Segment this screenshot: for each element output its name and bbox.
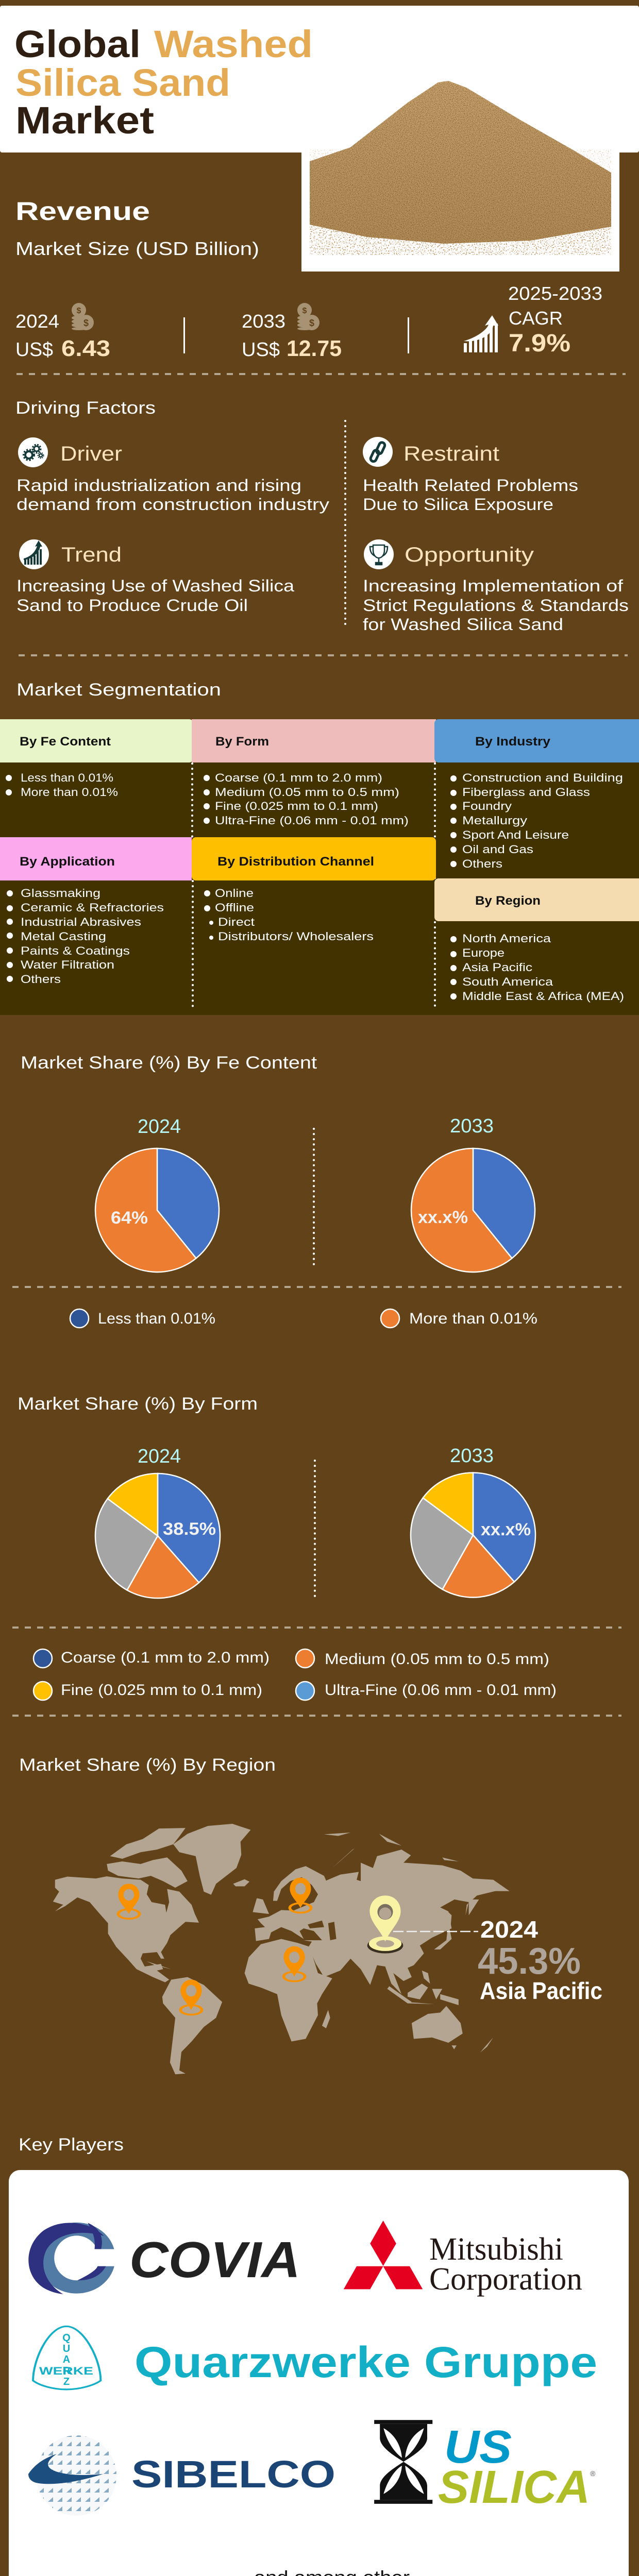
chart: form 2033 pie: [411, 1445, 535, 1597]
chart: fe content 2024 pie: [95, 1116, 219, 1272]
panel: restraint: Health Related Problems: [363, 476, 578, 495]
segment: by fe content: More than 0.01%: [21, 786, 118, 799]
revenue stat 2024: US$: [15, 339, 53, 361]
segment: by industry: Metallurgy: [462, 814, 527, 827]
segment: by distribution channel: Direct: [218, 916, 255, 928]
logo: us silica: ®: [590, 2469, 596, 2478]
segment: by application: Water Filtration: [21, 958, 114, 971]
revenue stat 2033: [242, 303, 342, 361]
revenue heading: Revenue: [15, 197, 150, 226]
market size subtitle: Market Size (USD Billion): [15, 238, 259, 259]
form heading: Market Share (%) By Form: [18, 1394, 258, 1414]
icon: trophy: [364, 539, 394, 569]
icon: pin europe: [290, 1878, 311, 1912]
segment: by region: Middle East & Africa (MEA): [462, 990, 624, 1003]
legend: form: [33, 1649, 557, 1700]
panel: market segmentation: [0, 719, 639, 1015]
logo: us silica: US: [444, 2421, 512, 2473]
logo: mitsubishi corporation: [344, 2221, 582, 2297]
north america: [53, 1876, 199, 1982]
segment: by distribution channel: Distributors/ Wholesalers: [218, 930, 374, 943]
panel: opportunity: for Washed Silica Sand: [363, 615, 563, 634]
chart: fe content 2024 pie: 2024: [138, 1116, 181, 1138]
icon: trend arrow: [19, 539, 49, 569]
segment: by application: Ceramic & Refractories: [21, 901, 164, 914]
segment: by form: Ultra-Fine (0.06 mm - 0.01 mm): [215, 814, 409, 827]
segment: by industry: Sport And Leisure: [462, 828, 569, 841]
segment: by region: North America: [462, 932, 551, 945]
australia: [412, 2006, 493, 2053]
legend: fe content: More than 0.01%: [409, 1310, 537, 1327]
icon: coins: [297, 303, 320, 330]
logo: quarzwerke gruppe: U: [63, 2343, 70, 2354]
logo: mitsubishi corporation: Corporation: [429, 2262, 582, 2297]
title: Silica Sand: [15, 61, 230, 104]
title: Washed: [154, 23, 313, 65]
logo: covia: COVIA: [129, 2231, 300, 2288]
logo: quarzwerke gruppe: WERKE: [39, 2365, 93, 2377]
legend: form: Fine (0.025 mm to 0.1 mm): [61, 1682, 262, 1699]
segment: by form: Fine (0.025 mm to 0.1 mm): [215, 800, 378, 812]
segment: by application: Industrial Abrasives: [21, 916, 141, 928]
segment: by application: Paints & Coatings: [21, 944, 130, 957]
segment: by fe content: Less than 0.01%: [21, 771, 113, 784]
panel: key players: [9, 2170, 629, 2576]
panel: trend: Increasing Use of Washed Silica: [16, 577, 294, 595]
segment: by application: Others: [21, 973, 61, 986]
legend: form: Medium (0.05 mm to 0.5 mm): [325, 1651, 549, 1668]
world map: [53, 1824, 510, 2074]
logo: quarzwerke gruppe: Q: [62, 2332, 71, 2344]
map pins: [118, 1878, 403, 2014]
chart: form 2033 pie: 2033: [450, 1445, 494, 1467]
icon: gears: [18, 437, 48, 467]
legend: fe content: Less than 0.01%: [98, 1310, 215, 1327]
revenue stat 2024: 2024: [15, 311, 59, 332]
icon: chain link: [363, 437, 393, 467]
panel: restraint: [363, 437, 578, 514]
CAGR stat: 2025-2033: [508, 283, 602, 304]
logo: us silica: [374, 2420, 596, 2513]
segment: by region: South America: [462, 975, 553, 988]
revenue stat 2024: 6.43: [61, 336, 110, 361]
callout: asia pacific share: 2024: [480, 1916, 538, 1943]
icon: pin south america: [180, 1980, 202, 2014]
icon: coins: $: [302, 307, 307, 315]
legend: fe content: [70, 1309, 537, 1328]
revenue stat 2033: US$: [242, 339, 280, 361]
panel: trend: Sand to Produce Crude Oil: [16, 596, 248, 615]
panel: restraint: Due to Silica Exposure: [363, 495, 553, 514]
eurasia: [255, 1850, 510, 1994]
segment: by industry: Fiberglass and Glass: [462, 786, 590, 799]
CAGR stat: CAGR: [509, 308, 563, 329]
logo: covia: [28, 2223, 300, 2294]
driving factors heading: Driving Factors: [15, 398, 156, 418]
segment: by region: Asia Pacific: [462, 961, 532, 974]
chart: form 2024 pie: [95, 1446, 220, 1598]
segment: by region: [434, 878, 639, 1003]
callout: asia pacific share: Asia Pacific: [480, 1977, 602, 2004]
segment: by distribution channel: Online: [215, 887, 254, 900]
logo: quarzwerke gruppe: Z: [63, 2376, 70, 2387]
fe content heading: Market Share (%) By Fe Content: [21, 1053, 317, 1073]
chart: fe content 2033 pie: 2033: [450, 1115, 494, 1137]
revenue stat 2024: [15, 303, 110, 361]
icon: pin africa: [284, 1946, 305, 1981]
segment: by region: By Region: [475, 894, 541, 908]
segment: by application: [0, 837, 192, 986]
icon: coins: $: [309, 318, 314, 328]
logo: sibelco: [28, 2432, 335, 2519]
legend: form: Ultra-Fine (0.06 mm - 0.01 mm): [325, 1682, 557, 1699]
segment: by distribution channel: [192, 837, 436, 943]
CAGR stat: 7.9%: [509, 330, 570, 357]
segment: by form: Medium (0.05 mm to 0.5 mm): [215, 786, 399, 799]
segment: by region: Europe: [462, 946, 505, 959]
panel: driver: Rapid industrialization and rising: [16, 476, 301, 495]
chart: fe content 2033 pie: [411, 1115, 535, 1272]
logo: mitsubishi corporation: Mitsubishi: [429, 2232, 563, 2267]
segment: by form: [192, 719, 436, 827]
icon: coins: $: [83, 318, 89, 328]
segment: by form: By Form: [215, 735, 269, 749]
icon: growth arrow: [464, 315, 498, 352]
panel: opportunity: Increasing Implementation of: [363, 577, 623, 595]
chart: fe content 2033 pie: xx.x%: [418, 1208, 468, 1227]
revenue stat 2033: 2033: [242, 311, 285, 332]
logo: us silica: SILICA: [438, 2462, 590, 2513]
segment: by industry: [434, 719, 639, 870]
callout: asia pacific share: [393, 1916, 602, 2004]
logo: quarzwerke gruppe: Quarzwerke Gruppe: [134, 2338, 597, 2386]
segment: by industry: Others: [462, 857, 502, 870]
segment: by form: Coarse (0.1 mm to 2.0 mm): [215, 771, 382, 784]
segment: by distribution channel: Offline: [215, 901, 254, 914]
header panel: [0, 6, 639, 152]
title: Market: [15, 99, 154, 142]
segment: by fe content: [0, 719, 193, 799]
panel: trend: Trend: [61, 544, 122, 566]
icon: coins: $: [77, 307, 81, 315]
icon: pin north america: [118, 1884, 140, 1919]
key players heading: Key Players: [19, 2135, 124, 2155]
logo: quarzwerke gruppe: [33, 2326, 597, 2389]
panel: opportunity: Strict Regulations & Standards: [363, 596, 629, 615]
panel: driver: demand from construction industry: [16, 495, 329, 514]
panel: opportunity: Opportunity: [405, 544, 534, 566]
logo: quarzwerke gruppe: A: [63, 2354, 70, 2365]
icon: pin asia pacific: [367, 1895, 403, 1954]
region heading: Market Share (%) By Region: [19, 1755, 276, 1775]
segment: by industry: Foundry: [462, 800, 512, 812]
segment: by application: Metal Casting: [21, 930, 106, 943]
logo: sibelco: SIBELCO: [131, 2453, 335, 2496]
revenue stat 2033: 12.75: [287, 336, 342, 361]
panel: opportunity: [363, 539, 629, 634]
segment: by application: Glassmaking: [21, 887, 100, 900]
title: Global: [14, 23, 141, 65]
panel: driver: [16, 437, 329, 514]
image: silica sand pile: [301, 81, 619, 272]
segment: by fe content: By Fe Content: [20, 735, 111, 749]
panel: restraint: Restraint: [403, 443, 499, 465]
segment: by industry: By Industry: [475, 735, 551, 749]
chart: form 2024 pie: 38.5%: [163, 1519, 216, 1539]
callout: asia pacific share: 45.3%: [478, 1941, 581, 1982]
panel: trend: [16, 539, 294, 615]
panel: driver: Driver: [60, 443, 122, 465]
logo: quarzwerke gruppe: R: [63, 2365, 71, 2377]
market segmentation heading: Market Segmentation: [16, 680, 221, 700]
segment: by application: By Application: [20, 855, 115, 869]
segment: by industry: Construction and Building: [462, 771, 623, 784]
CAGR stat: [464, 283, 602, 357]
title: [14, 23, 313, 142]
segment: by distribution channel: By Distribution Channel: [217, 855, 374, 869]
south america: [162, 1977, 222, 2074]
segment: by industry: Oil and Gas: [462, 843, 533, 856]
africa: [245, 1939, 332, 2041]
icon: coins: [72, 303, 94, 330]
legend: form: Coarse (0.1 mm to 2.0 mm): [61, 1649, 270, 1666]
chart: fe content 2024 pie: 64%: [111, 1208, 148, 1228]
chart: form 2024 pie: 2024: [138, 1446, 181, 1467]
chart: form 2033 pie: xx.x%: [481, 1520, 531, 1539]
